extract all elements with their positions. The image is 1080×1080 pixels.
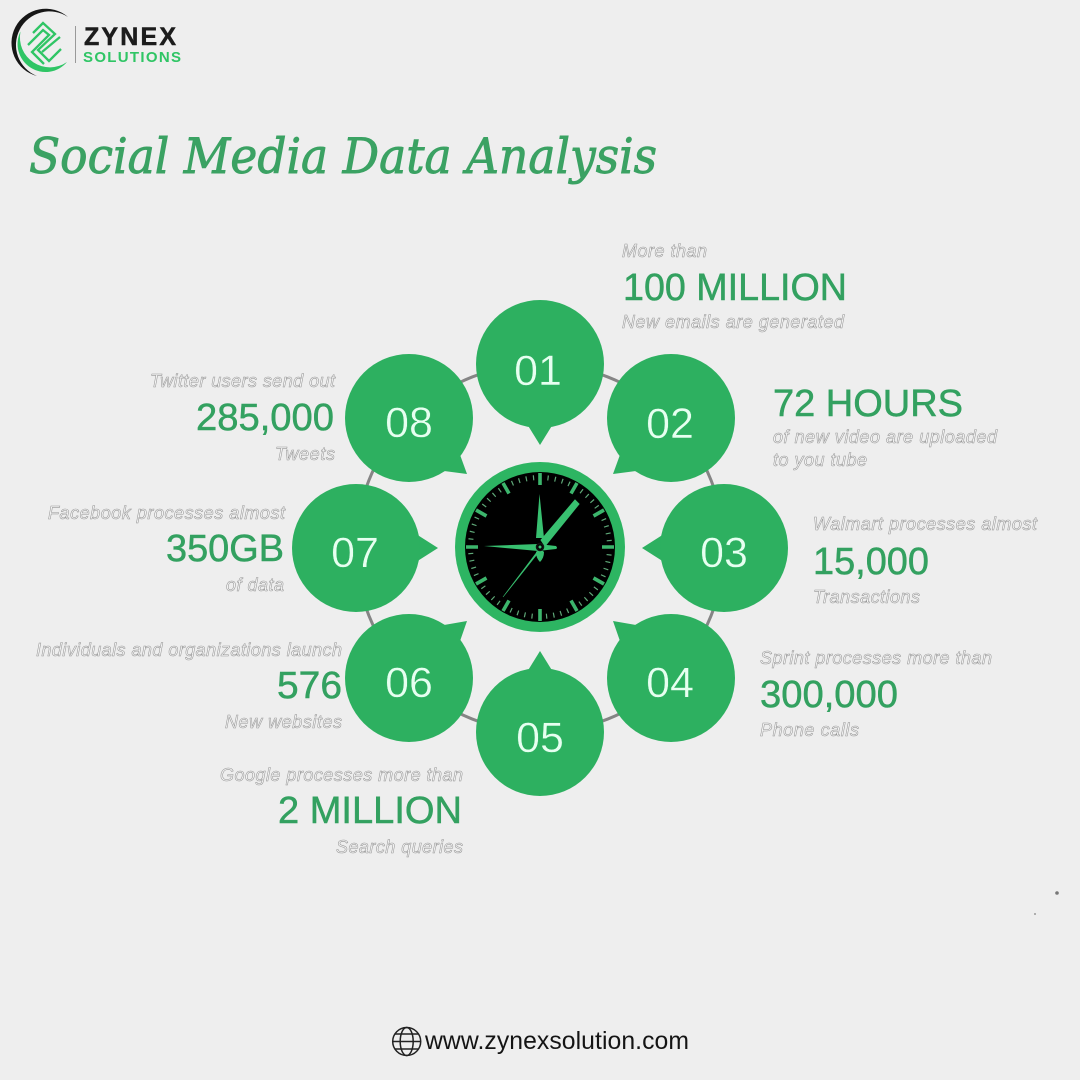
stat 05: 2 MILLION: [278, 790, 462, 832]
stat 02: to you tube: [773, 450, 867, 470]
stat 01: 100 MILLION: [623, 267, 847, 309]
stat 05: Google processes more than: [220, 765, 463, 785]
stat 08: Tweets: [275, 444, 335, 464]
logo divider: [75, 26, 76, 63]
bubble 08: [345, 354, 473, 482]
stat 06: [36, 640, 342, 732]
clock rim: [455, 462, 625, 632]
clock face: [465, 472, 615, 622]
bubble 05: [476, 651, 604, 796]
bubble 06: [345, 614, 473, 742]
connecting ring: [356, 364, 724, 732]
stat 02: [773, 383, 998, 470]
stat 07: [48, 503, 286, 595]
clock hour ticks: [466, 473, 614, 621]
icon: globe: [393, 1028, 421, 1056]
stat 08: [150, 371, 336, 464]
bubble 07: 07: [331, 529, 379, 577]
stat 03: Transactions: [813, 587, 920, 607]
bubble 07: [292, 484, 438, 612]
clock: [455, 462, 625, 632]
logo tagline: SOLUTIONS: [83, 49, 181, 66]
logo: [11, 9, 181, 76]
footer website: [393, 1028, 689, 1056]
stat 02: of new video are uploaded: [773, 427, 998, 447]
stat 05: Search queries: [336, 837, 463, 857]
bubble 05: 05: [516, 714, 564, 762]
bubble 01: [476, 300, 604, 445]
stat 03: Walmart processes almost: [813, 514, 1038, 534]
stat 05: [220, 765, 463, 857]
bubble 02: [607, 354, 735, 482]
specks: [1055, 891, 1059, 895]
bubble 08: 08: [385, 399, 433, 447]
stat 08: Twitter users send out: [150, 371, 336, 391]
stat 07: Facebook processes almost: [48, 503, 286, 523]
stat 07: 350GB: [166, 528, 284, 570]
stat 02: 72 HOURS: [773, 383, 963, 425]
bubble 01: 01: [514, 347, 562, 395]
stat 03: [813, 514, 1038, 607]
stat 07: of data: [226, 575, 284, 595]
bubble 04: 04: [646, 659, 694, 707]
stat 04: Phone calls: [760, 720, 859, 740]
website url: www.zynexsolution.com: [424, 1028, 689, 1055]
stat 01: [622, 241, 847, 332]
clock hands: [484, 494, 579, 597]
bubble 03: 03: [700, 529, 748, 577]
title: Social Media Data Analysis: [29, 128, 657, 185]
stat 06: 576: [277, 665, 342, 707]
stat 03: 15,000: [813, 541, 929, 583]
stat 06: New websites: [225, 712, 342, 732]
stat 04: Sprint processes more than: [760, 648, 992, 668]
bubble 03: [642, 484, 788, 612]
stat 01: More than: [622, 241, 707, 261]
icon: logo swoosh: [11, 9, 68, 76]
stat 06: Individuals and organizations launch: [36, 640, 342, 660]
clock minute ticks: [470, 478, 610, 616]
bubble 06: 06: [385, 659, 433, 707]
bubble 02: 02: [646, 400, 694, 448]
bubble 04: [607, 614, 735, 742]
logo wordmark: ZYNEX: [84, 23, 176, 51]
stat 01: New emails are generated: [622, 312, 845, 332]
stat 04: 300,000: [760, 674, 898, 716]
clock pin: [536, 544, 544, 550]
stat 04: [760, 648, 992, 740]
stat 08: 285,000: [196, 397, 334, 439]
